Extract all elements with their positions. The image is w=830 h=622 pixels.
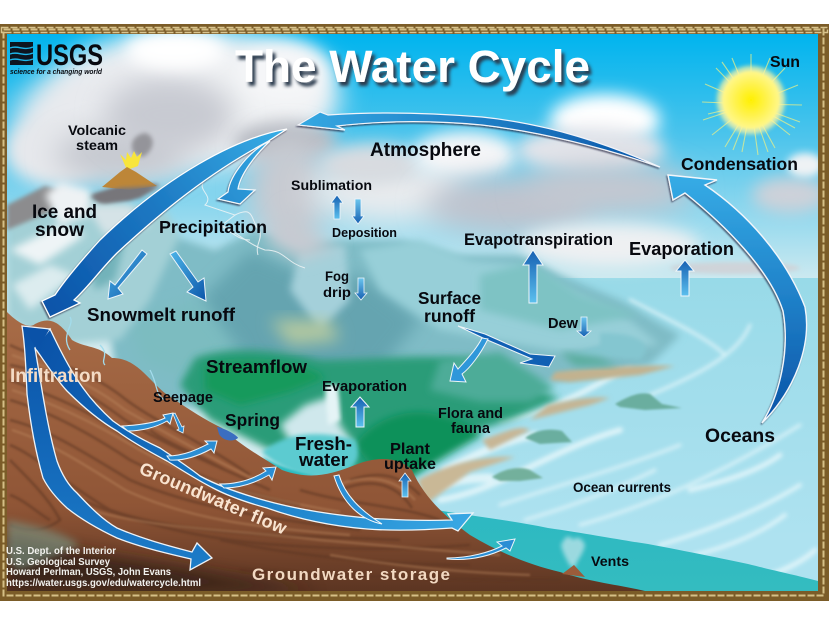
label: vents: Vents	[591, 553, 629, 569]
label: ocean currents: Ocean currents	[573, 480, 671, 495]
arrow: evapotranspiration	[523, 250, 543, 303]
credits	[6, 545, 201, 589]
credits: https://water.usgs.gov/edu/watercycle.html	[6, 577, 201, 589]
label: freshwater	[295, 433, 352, 470]
label: plant uptake: Plant	[390, 441, 431, 458]
credits: U.S. Geological Survey	[6, 556, 110, 568]
label: plant uptake: uptake	[384, 456, 436, 473]
earth strata	[7, 312, 645, 591]
arrow: seepage down	[173, 413, 184, 433]
clouds	[5, 28, 828, 274]
icon: spring pool	[217, 427, 238, 441]
arrow: evaporation from freshwater	[351, 397, 369, 427]
label: groundwater storage: Groundwater storage	[252, 565, 450, 584]
arrow: deposition down	[352, 199, 364, 224]
arrow: surface runoff to ocean	[458, 326, 555, 367]
icon: melt streams	[66, 317, 165, 400]
arrow: evaporation from ocean	[676, 260, 694, 296]
credits: U.S. Dept. of the Interior	[6, 545, 116, 557]
label: dew: Dew	[548, 316, 579, 332]
label: flora and fauna: fauna	[451, 421, 491, 437]
icon: vent plume	[561, 537, 585, 577]
arrow: fog drip	[355, 278, 367, 300]
label: fog drip	[323, 268, 351, 300]
teal mountains	[106, 228, 680, 414]
label: infiltration: Infiltration	[10, 366, 102, 387]
label: ice and snow	[32, 202, 97, 241]
arrow: dew	[577, 317, 591, 337]
arrow: infiltration to groundwater storage	[22, 326, 212, 570]
label: flora and fauna	[438, 406, 503, 437]
label: flora and fauna: Flora and	[438, 406, 503, 422]
label: freshwater: water	[298, 449, 348, 470]
credits: Howard Perlman, USGS, John Evans	[6, 566, 171, 578]
arrow: snowmelt left	[108, 250, 147, 299]
arrow: freshwater branch	[220, 467, 276, 488]
arrow: plant uptake	[399, 473, 411, 497]
arrow: submarine discharge	[447, 539, 515, 559]
arrow: sublimation up	[331, 195, 343, 219]
label: fog drip: Fog	[325, 268, 349, 284]
label: precipitation: Precipitation	[159, 217, 267, 237]
label: evaporation over freshwater: Evaporation	[322, 379, 407, 395]
icon: sun	[702, 54, 802, 155]
arrow: groundwater flow	[35, 329, 473, 531]
label: atmosphere: Atmosphere	[370, 140, 481, 161]
label: surface runoff	[418, 288, 481, 326]
green lowlands	[180, 320, 560, 480]
label: sun: Sun	[770, 54, 800, 71]
label: spring: Spring	[225, 410, 280, 430]
icon: USGS logo: USGS	[36, 39, 103, 72]
label: freshwater: Fresh-	[295, 433, 352, 454]
ocean	[400, 278, 818, 591]
arrow: precipitation from cloud	[218, 141, 270, 204]
label: evapotranspiration: Evapotranspiration	[464, 231, 613, 249]
label: ice and snow: snow	[35, 220, 84, 241]
icon: USGS logo: science for a changing world	[10, 67, 102, 76]
arrow: freshwater seepage	[334, 475, 382, 524]
label: ice and snow: Ice and	[32, 202, 97, 223]
label: sublimation: Sublimation	[291, 177, 372, 193]
sandy coast and islands	[418, 333, 682, 505]
label: oceans: Oceans	[705, 426, 775, 447]
label: streamflow: Streamflow	[206, 356, 307, 377]
title: The Water Cycle	[235, 41, 590, 92]
label: condensation: Condensation	[681, 154, 798, 174]
label: surface runoff: Surface	[418, 288, 481, 308]
label: fog drip: drip	[323, 284, 351, 300]
label: volcanic steam: steam	[76, 137, 118, 153]
label: evaporation over ocean: Evaporation	[629, 239, 734, 259]
arrow: surface runoff to land	[450, 338, 488, 382]
arrow: spring branch	[167, 441, 217, 460]
icon: lightning bolts	[202, 180, 305, 268]
arrow: infiltration head join	[24, 327, 49, 350]
label: plant uptake	[384, 441, 436, 473]
arrow: main precipitation descent	[42, 129, 287, 317]
arrow: seepage branch	[122, 413, 173, 431]
label: groundwater flow: Groundwater flow	[136, 458, 291, 539]
label: deposition: Deposition	[332, 226, 397, 240]
label: volcanic steam	[68, 122, 126, 153]
label: volcanic steam: Volcanic	[68, 122, 126, 138]
icon: USGS logo	[10, 39, 103, 76]
arrow: transport across the atmosphere	[298, 112, 660, 167]
label: snowmelt runoff: Snowmelt runoff	[87, 304, 236, 325]
label: seepage: Seepage	[153, 390, 213, 406]
icon: volcano	[90, 133, 160, 203]
arrow: snowmelt right	[170, 251, 206, 301]
snowy peaks	[7, 182, 180, 345]
label: surface runoff: runoff	[424, 306, 475, 326]
arrow: rising evaporation to condensation	[668, 175, 807, 423]
deep teal water	[425, 508, 818, 591]
